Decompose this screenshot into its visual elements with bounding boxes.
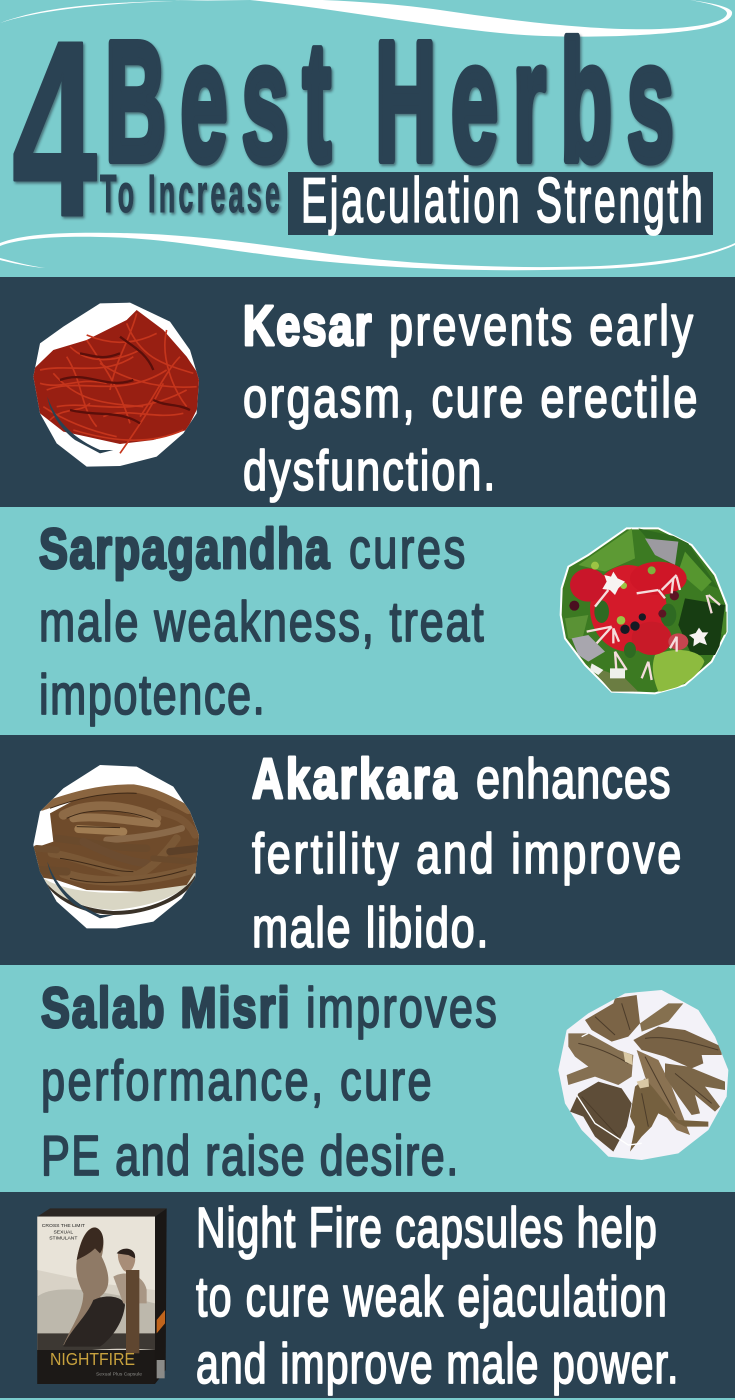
subtitle: Ejaculation Strength: Ejaculation Strength: [301, 167, 703, 236]
text: Akarkara: fertility and improve: [252, 821, 681, 885]
text: Salab Misri: PE and raise desire.: [41, 1123, 458, 1187]
text: Sarpagandha: [39, 516, 484, 726]
subtitle banner: [288, 167, 713, 236]
icon: sarpagandha flowers: [561, 528, 727, 693]
box tagline: CROSS THE LIMIT: [42, 1223, 85, 1229]
top decorative swoosh: [0, 0, 732, 37]
icon: saffron threads: [33, 303, 200, 467]
text: Night Fire: [196, 1195, 678, 1396]
text: Kesar: dysfunction.: [243, 438, 495, 502]
bottom decorative swoosh: [0, 233, 735, 270]
text: Akarkara: enhances: [476, 746, 671, 810]
box tagline: SEXUAL: [53, 1229, 73, 1235]
text: Sarpagandha: cures: [349, 516, 465, 580]
text: Salab Misri: improves: [306, 975, 497, 1039]
subtitle: To Increase: To Increase: [100, 164, 280, 225]
panel: Sarpagandha: [39, 526, 728, 727]
text: Sarpagandha: Sarpagandha: [39, 516, 330, 580]
box sublabel: Sexual Plus Capsule: [96, 1371, 142, 1376]
box tagline: STIMULANT: [49, 1236, 77, 1242]
text: Kesar: orgasm, cure erectile: [243, 365, 697, 429]
title word: Herbs: Herbs: [375, 7, 674, 197]
panel: Akarkara: [0, 735, 735, 965]
icon: salab misri roots: [558, 990, 728, 1160]
text: Kesar: Kesar: [243, 293, 371, 357]
text: Night Fire: Night Fire capsules help: [196, 1195, 657, 1260]
text: Night Fire: and improve male power.: [196, 1331, 678, 1396]
panel: Salab Misri: [41, 984, 728, 1176]
icon: Night Fire product box: [37, 1208, 167, 1384]
text: Salab Misri: performance, cure: [41, 1048, 432, 1112]
box logo: Night Fire: NIGHTFIRE: [50, 1349, 135, 1369]
text: Akarkara: male libido.: [252, 895, 488, 959]
text: Kesar: prevents early: [389, 293, 694, 357]
text: Sarpagandha: male weakness, treat: [39, 589, 484, 653]
title word: Best: Best: [105, 7, 331, 197]
text: Kesar: [243, 293, 697, 502]
panel: Kesar: [0, 277, 735, 507]
panel: Night Fire capsules: [0, 1192, 735, 1398]
text: Akarkara: [252, 746, 681, 959]
icon: akarkara roots on plate: [33, 765, 199, 928]
text: Salab Misri: Salab Misri: [41, 975, 290, 1039]
text: Akarkara: Akarkara: [252, 746, 457, 810]
title: [12, 0, 674, 268]
text: Salab Misri: [41, 975, 497, 1187]
text: Sarpagandha: impotence.: [39, 662, 265, 726]
text: Night Fire: to cure weak ejaculation: [196, 1264, 667, 1329]
